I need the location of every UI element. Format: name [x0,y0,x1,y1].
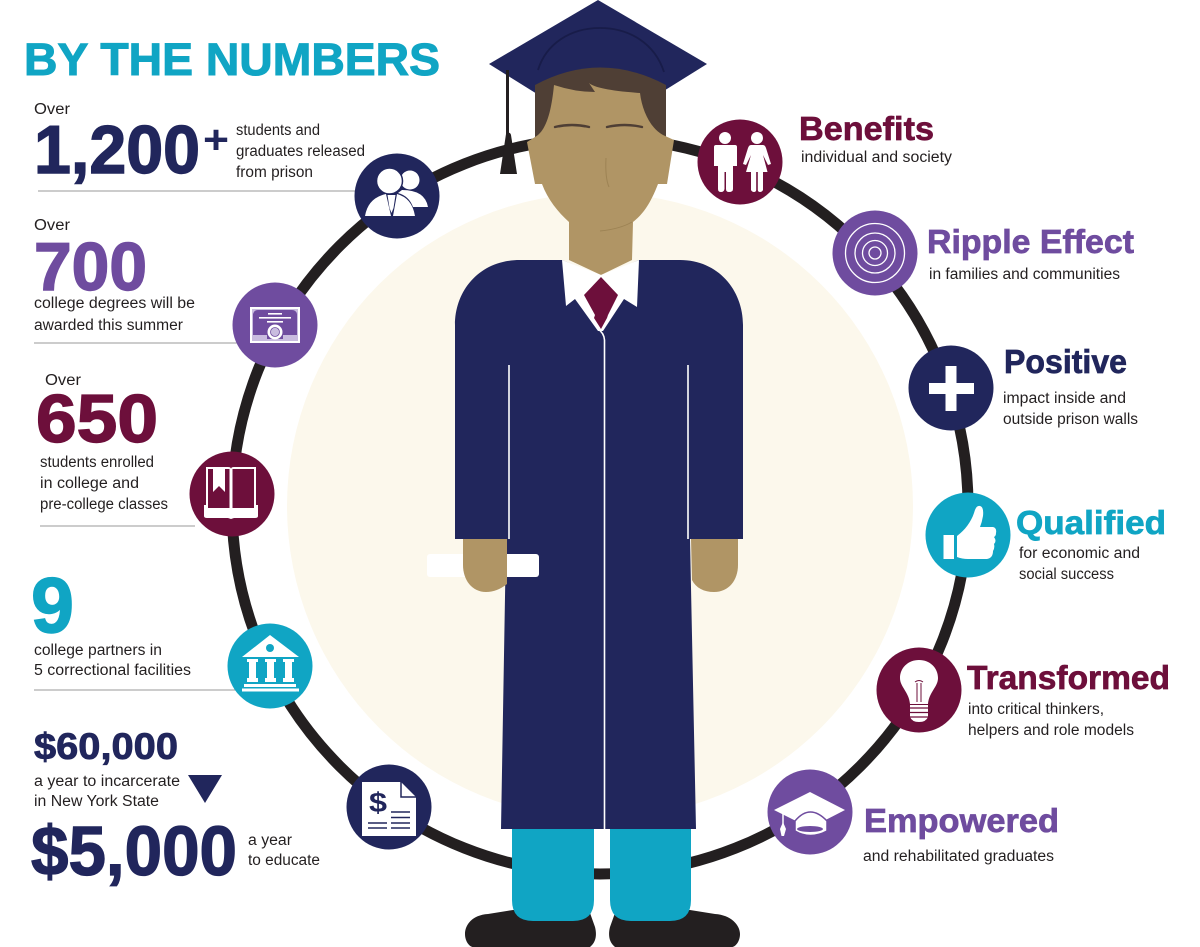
icon: light bulb [876,648,962,732]
stat: cost comparison: in New York State [34,793,159,810]
stat: cost comparison: a year to incarcerate [34,773,180,790]
stat: cost comparison [31,726,320,890]
stat: 1,200+ students released: from prison [236,164,313,181]
empowered item: and rehabilitated graduates [863,848,1054,865]
stat: 650 students enrolled: Over [45,372,81,389]
stat: 650 students enrolled [36,372,195,526]
stat: 700 degrees: Over [34,217,70,234]
title: BY THE NUMBERS [24,34,440,85]
stat: 1,200+ students released: 1,200 [34,112,200,188]
positive item: Positive [1004,343,1127,380]
stat: 650 students enrolled: students enrolled [40,454,154,471]
stat: 1,200+ students released: + [203,118,229,162]
stat: 1,200+ students released: students and [236,122,320,139]
icon: diploma [232,282,318,368]
stat: 700 degrees [34,217,240,344]
stat: cost comparison: $5,000 [31,812,237,890]
shoes [465,910,740,947]
transformed item [876,648,1170,739]
qualified item: social success [1019,566,1114,583]
stat: 9 college partners: college partners in [34,642,162,659]
ripple effect item [832,210,1134,296]
icon: institution building [228,624,312,708]
icon: graduation cap [768,770,852,854]
stat: 9 college partners: 9 [31,561,74,649]
tassel [500,70,517,174]
positive item: impact inside and [1003,390,1126,407]
benefits item: Benefits [799,110,934,147]
graduate figure [427,0,743,947]
right hand [691,539,738,592]
stat: 9 college partners: 5 correctional facilities [34,662,191,679]
icon: people [354,154,440,238]
transformed item: Transformed [967,659,1170,696]
transformed item: helpers and role models [968,722,1134,739]
stat: 700 degrees: college degrees will be [34,295,195,312]
gown seams [509,329,688,829]
icon: plus [908,346,994,430]
collar [562,260,639,331]
face and neck [527,83,674,275]
stat: 1,200+ students released: graduates released [236,143,365,160]
timeline ring [232,138,968,874]
tie [584,277,618,329]
stat: 1,200+ students released: Over [34,101,70,118]
icon: down triangle [188,775,222,803]
stat: cost comparison: to educate [248,852,320,869]
stat: cost comparison: a year [248,832,292,849]
ripple effect item: Ripple Effect [927,223,1134,260]
positive item [908,343,1138,430]
positive item: outside prison walls [1003,411,1138,428]
empowered item: Empowered [864,802,1059,839]
cap [489,0,707,132]
stat: cost comparison: $60,000 [34,726,178,767]
qualified item [926,492,1166,583]
stat: 650 students enrolled: 650 [36,381,158,457]
stat: 700 degrees: awarded this summer [34,317,183,334]
benefits item [698,110,952,204]
icon: dollar document [346,764,432,850]
ripple effect item: in families and communities [929,266,1120,283]
stat: 650 students enrolled: in college and [40,475,139,492]
nose and jaw lines [600,158,632,231]
stat: 700 degrees: 700 [34,229,147,305]
left hand [463,539,507,592]
icon: concentric ripples [832,210,918,296]
hair [535,68,666,138]
stat: 650 students enrolled: pre-college classes [40,496,168,513]
stat: 9 college partners [31,561,240,690]
icon: thumbs up [926,492,1010,578]
icon: open book [190,452,274,536]
qualified item: Qualified [1016,504,1166,541]
benefits item: individual and society [801,149,952,166]
trousers [512,829,691,921]
eyebrows [555,125,642,127]
empowered item [768,770,1059,865]
icon: man and woman [698,120,782,204]
qualified item: for economic and [1019,545,1140,562]
icon: dollar document: $ [369,787,387,818]
background cream circle [287,193,913,819]
transformed item: into critical thinkers, [968,701,1104,718]
diploma scroll [427,554,539,577]
stat: 1,200+ students released [34,101,365,192]
gown [455,260,743,829]
